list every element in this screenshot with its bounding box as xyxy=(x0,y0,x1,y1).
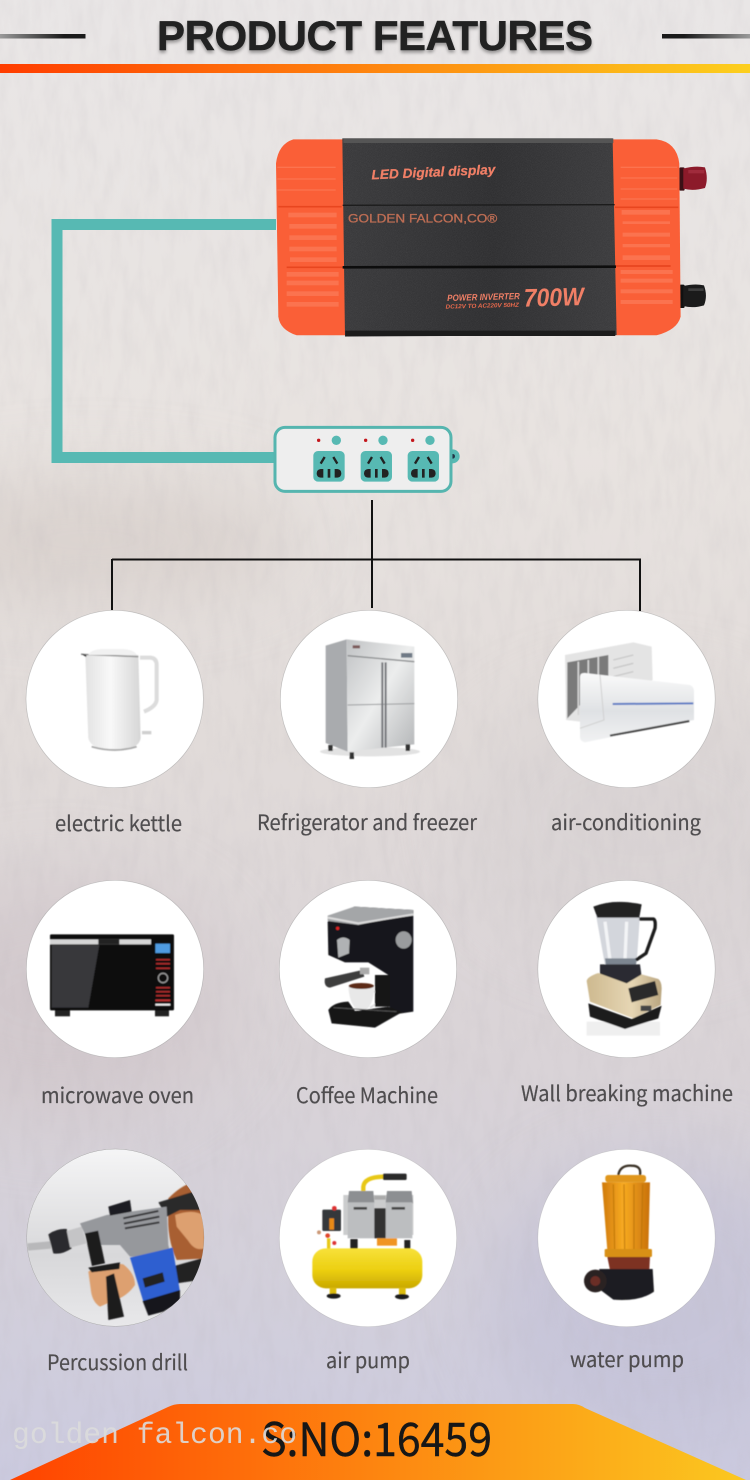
disc xyxy=(538,610,715,788)
panel edges xyxy=(343,134,613,148)
disc xyxy=(26,880,204,1058)
terminal: black xyxy=(679,284,706,308)
black centre panel xyxy=(342,138,617,337)
item: air pump xyxy=(279,1149,457,1375)
item: wall breaking machine xyxy=(521,880,733,1108)
orange casing xyxy=(276,139,681,335)
casing ribs xyxy=(277,167,677,307)
icon: blender xyxy=(587,902,662,1036)
disc xyxy=(279,1149,457,1327)
icon: microwave xyxy=(50,934,174,1016)
item: water pump xyxy=(538,1149,715,1374)
icon: air conditioner xyxy=(565,642,694,742)
terminal: red xyxy=(679,167,707,191)
disc xyxy=(538,1149,715,1327)
disc xyxy=(280,610,458,788)
disc xyxy=(279,880,457,1058)
watermark: golden falcon.co xyxy=(12,1418,297,1452)
label: microwave oven xyxy=(41,1080,194,1110)
icon: kettle xyxy=(81,649,157,751)
footer trapezoid xyxy=(10,1404,746,1480)
item: air-conditioning xyxy=(538,610,715,837)
serial number: S:NO:16459 xyxy=(261,1404,492,1470)
item: electric kettle xyxy=(26,610,203,838)
indicators xyxy=(317,436,435,445)
label: Coffee Machine xyxy=(296,1080,438,1110)
icon: refrigerator xyxy=(320,639,420,759)
label: Percussion drill xyxy=(47,1347,188,1377)
power strip xyxy=(275,427,460,491)
label: air pump xyxy=(326,1345,410,1375)
teal cable from inverter to power strip xyxy=(57,224,276,458)
header rule: right xyxy=(662,34,750,38)
label: water pump xyxy=(570,1344,684,1374)
socket 1 xyxy=(313,451,345,482)
printed text: brand: GOLDEN FALCON,CO® xyxy=(348,211,497,225)
icon: air compressor xyxy=(312,1174,422,1299)
item: coffee machine xyxy=(279,880,457,1110)
icon: hammer drill on disc xyxy=(27,1149,207,1326)
label: electric kettle xyxy=(55,808,182,838)
disc xyxy=(26,610,203,788)
printed text: LED Digital display: LED Digital display xyxy=(371,162,496,182)
disc xyxy=(538,880,715,1058)
printed text: power inverter: POWER INVERTER xyxy=(447,291,520,303)
panel speckle xyxy=(342,138,617,337)
socket 2 xyxy=(361,451,392,482)
strip body xyxy=(275,427,451,491)
label: Wall breaking machine xyxy=(521,1078,733,1108)
header gradient bar xyxy=(0,64,750,73)
printed text: 700W: 700W xyxy=(523,283,586,313)
item: microwave oven xyxy=(26,880,204,1110)
header rule: left xyxy=(0,34,86,38)
header xyxy=(0,12,750,73)
printed text: ratings: DC12V TO AC220V 50HZ xyxy=(446,303,519,311)
footer xyxy=(10,1404,746,1480)
connector tree xyxy=(112,500,641,611)
power inverter xyxy=(276,138,707,337)
item: refrigerator and freezer xyxy=(257,610,478,837)
socket 3 xyxy=(408,451,439,482)
strip tab xyxy=(446,449,460,463)
item: percussion drill xyxy=(27,1149,207,1377)
title: PRODUCT FEATURES xyxy=(157,12,593,59)
casing grooves xyxy=(278,207,678,267)
icon: submersible pump xyxy=(584,1166,654,1300)
label: Refrigerator and freezer xyxy=(257,807,478,837)
icon: coffee machine xyxy=(325,907,413,1028)
label: air-conditioning xyxy=(551,807,701,837)
